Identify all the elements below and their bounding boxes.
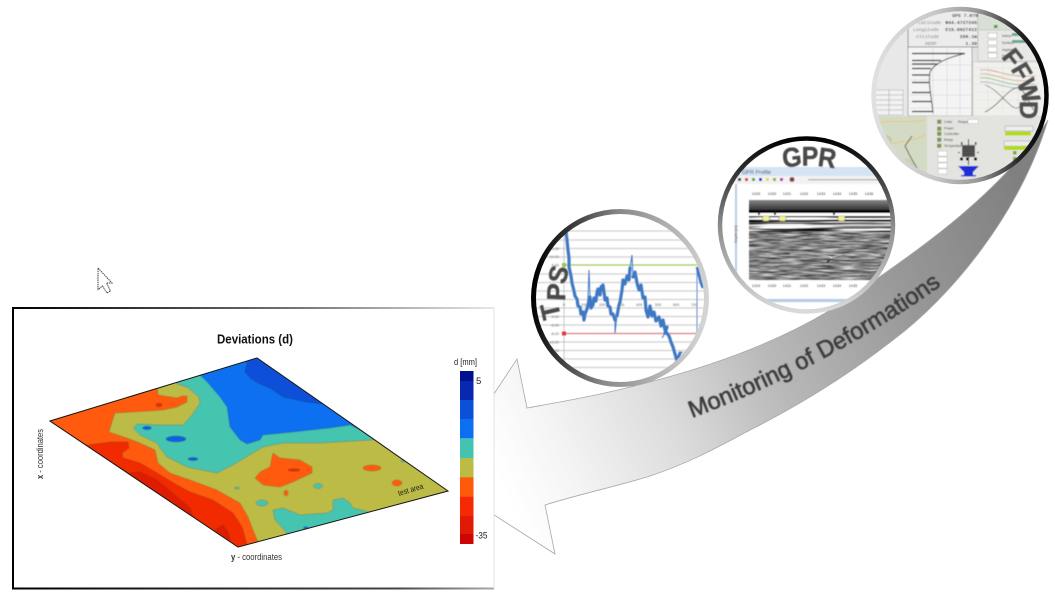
legend: d in mm: -35 xyxy=(476,530,488,542)
FFWD screen: Asphalt xyxy=(1002,48,1014,52)
markers: yellow tags xyxy=(762,216,845,221)
GPR window: 1434 xyxy=(833,192,841,196)
label: FFWD xyxy=(996,43,1045,119)
FFWD screen: Indoor xyxy=(1002,54,1013,58)
temperature curves xyxy=(973,62,1045,116)
TPS chart grid and data: 500 xyxy=(655,303,661,307)
panel: deviations contour map xyxy=(12,307,494,590)
label: TPS xyxy=(534,262,575,322)
TPS chart grid and data: 400 xyxy=(636,303,642,307)
TPS chart grid and data: 8,00 xyxy=(552,264,559,268)
markers: black pins xyxy=(758,210,835,215)
FFWD screen: Request xyxy=(958,120,971,124)
label: FFWD: F xyxy=(1005,58,1037,85)
FFWD screen: N44.4727245 xyxy=(945,20,977,26)
GPR window: 1435 xyxy=(849,284,857,288)
GPR window: 1434 xyxy=(833,284,841,288)
circle: TPS chart xyxy=(530,212,710,384)
FFWD screen: Controller xyxy=(944,132,960,136)
FFWD screen: Latitude xyxy=(918,20,941,26)
FFWD screen: E15.6927412 xyxy=(945,27,977,33)
TPS chart grid and data: -6,00 xyxy=(550,324,559,328)
TPS chart grid and data: 0 xyxy=(563,303,565,307)
FFWD screen: Power xyxy=(944,126,955,130)
FFWD screen: Altitude xyxy=(916,34,939,40)
label: test area: test area xyxy=(397,482,425,498)
label: y coordinates: y - coordinates xyxy=(231,552,282,562)
FFWD screen: Longitude xyxy=(913,27,939,33)
ring: FFWD border xyxy=(874,9,1046,182)
arrow label: Monitoring of Deformations xyxy=(687,276,940,418)
TPS chart grid and data: -8,00 xyxy=(550,332,559,336)
deflection chart xyxy=(908,47,972,116)
GPR window xyxy=(733,167,900,309)
GPR window: Depth [m] xyxy=(733,226,738,243)
label: GPR: R xyxy=(816,143,838,174)
icon: mouse cursor xyxy=(98,268,112,293)
label: TPS: T xyxy=(534,300,567,322)
GPR window: 1433 xyxy=(817,284,825,288)
top right panel xyxy=(977,14,1012,30)
GPR window: 1430 xyxy=(768,192,776,196)
label: FFWD: D xyxy=(1014,101,1042,119)
label: TPS: S xyxy=(542,262,575,286)
legend: d in mm: d [mm] xyxy=(454,357,477,367)
GPR window: 1432 xyxy=(800,284,808,288)
label: TPS: P xyxy=(541,283,572,301)
heading: deviations: Deviations (d) xyxy=(217,332,293,346)
GPR window: 1431 xyxy=(783,192,791,196)
FFWD screen xyxy=(876,12,1044,177)
GPR window: 1436 xyxy=(865,192,873,196)
TPS chart grid and data xyxy=(536,230,704,368)
label: GPR: P xyxy=(802,143,818,172)
circle: FFWD software xyxy=(870,0,1046,186)
GPR window: 1433 xyxy=(817,192,825,196)
ring: GPR border xyxy=(720,138,893,312)
FFWD screen: HDOP xyxy=(925,41,937,47)
label: FFWD: W xyxy=(1011,75,1045,107)
label: FFWD: F xyxy=(996,43,1028,73)
TPS chart grid and data: 10,00 xyxy=(549,255,559,259)
TPS chart grid and data: -12,00 xyxy=(548,349,559,353)
FFWD screen: Links xyxy=(944,120,952,124)
GPR window: 1429 xyxy=(752,284,760,288)
TPS chart grid and data: 700 xyxy=(691,303,697,307)
FFWD screen: Temperature xyxy=(944,144,964,148)
FFWD screen: Indoor xyxy=(1002,34,1013,38)
GPR window: 1431 xyxy=(783,284,791,288)
GPR window: 1429 xyxy=(752,192,760,196)
FFWD screen: 259.1m xyxy=(960,34,977,40)
ring: TPS border xyxy=(534,212,706,384)
contour map xyxy=(48,357,450,548)
GPR window: 1435 xyxy=(849,192,857,196)
icon: falling weight device xyxy=(958,139,979,176)
FFWD screen: 1.30 xyxy=(965,41,977,47)
control panel xyxy=(927,116,1032,178)
TPS chart grid and data: 600 xyxy=(673,303,679,307)
TPS chart grid and data: 200 xyxy=(599,303,605,307)
label: GPR: G xyxy=(781,143,803,174)
GPR window: GPR Profile xyxy=(742,170,771,176)
FFWD screen: Relay xyxy=(944,138,953,142)
label: GPR xyxy=(781,143,838,174)
map tile xyxy=(878,116,928,173)
TPS chart grid and data: -10,00 xyxy=(548,340,559,344)
TPS chart grid and data: 100 xyxy=(581,303,587,307)
FFWD screen: Surface xyxy=(1002,41,1014,45)
TPS chart grid and data: 300 xyxy=(618,303,624,307)
GPR window: 1432 xyxy=(800,192,808,196)
circle: GPR profile xyxy=(720,138,900,312)
label: x coordinates: x - coordinates xyxy=(35,429,45,479)
legend: d in mm: 5 xyxy=(476,376,481,387)
FFWD screen: GPS 7.079 xyxy=(952,13,978,19)
TPS chart grid and data: -4,00 xyxy=(550,315,559,319)
legend: d in mm xyxy=(454,357,488,544)
TPS chart grid and data: 12,00 xyxy=(549,247,559,251)
GPR window: 1430 xyxy=(768,284,776,288)
